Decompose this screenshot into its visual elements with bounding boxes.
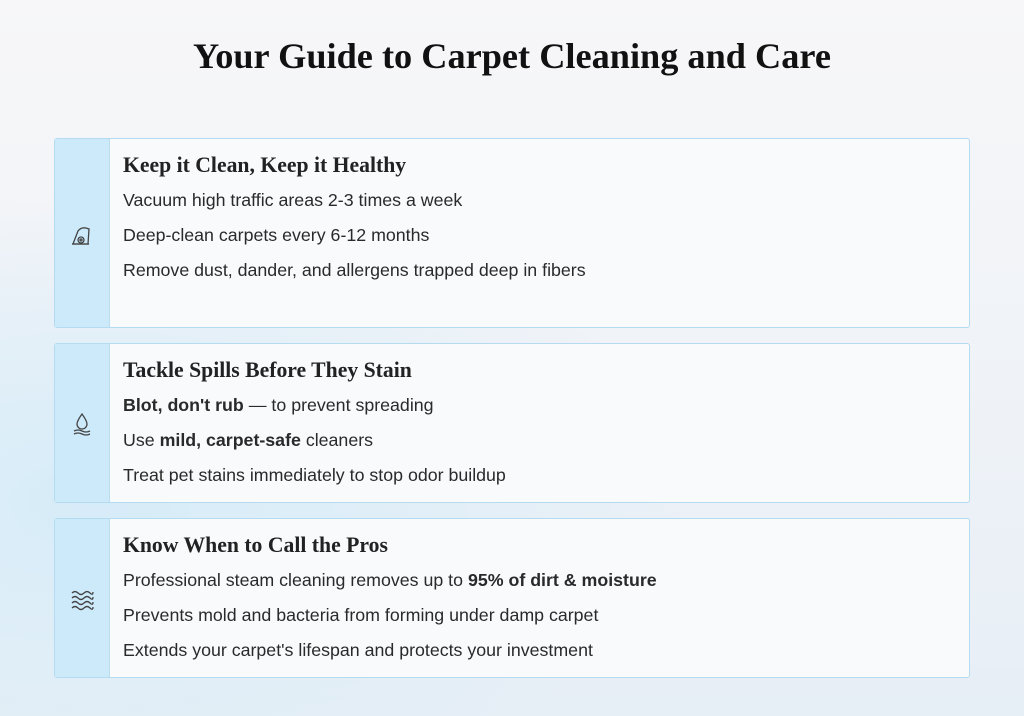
panel: pros [54,518,970,678]
panel: spills: Blot, don't rub — to prevent spreading [123,395,434,415]
panel: spills [54,343,970,503]
icon: waves [72,590,94,610]
title: Your Guide to Carpet Cleaning and Care [193,36,831,76]
panel: keep it clean [54,138,970,328]
panel: spills: Use mild, carpet-safe cleaners [123,430,373,450]
text block [123,190,586,280]
icon: water drop [74,413,90,436]
panel: pros: Prevents mold and bacteria from forming under damp carpet [123,605,598,625]
panel: keep it clean: Deep-clean carpets every 6-12 months [123,225,429,245]
panel: keep it clean: Remove dust, dander, and allergens trapped deep in fibers [123,260,586,280]
panel: spills: Treat pet stains immediately to stop odor buildup [123,465,506,485]
text block [123,570,657,660]
panel: pros: Professional steam cleaning removes up to 95% of dirt & moisture [123,570,657,590]
panel: pros: Extends your carpet's lifespan and protects your investment [123,640,593,660]
heading: Keep it Clean, Keep it Healthy [123,153,406,177]
panel: keep it clean: Vacuum high traffic areas 2-3 times a week [123,190,462,210]
heading: Know When to Call the Pros [123,533,388,557]
heading: Tackle Spills Before They Stain [123,358,412,382]
text block [123,395,506,485]
icon: vacuum [72,227,90,245]
